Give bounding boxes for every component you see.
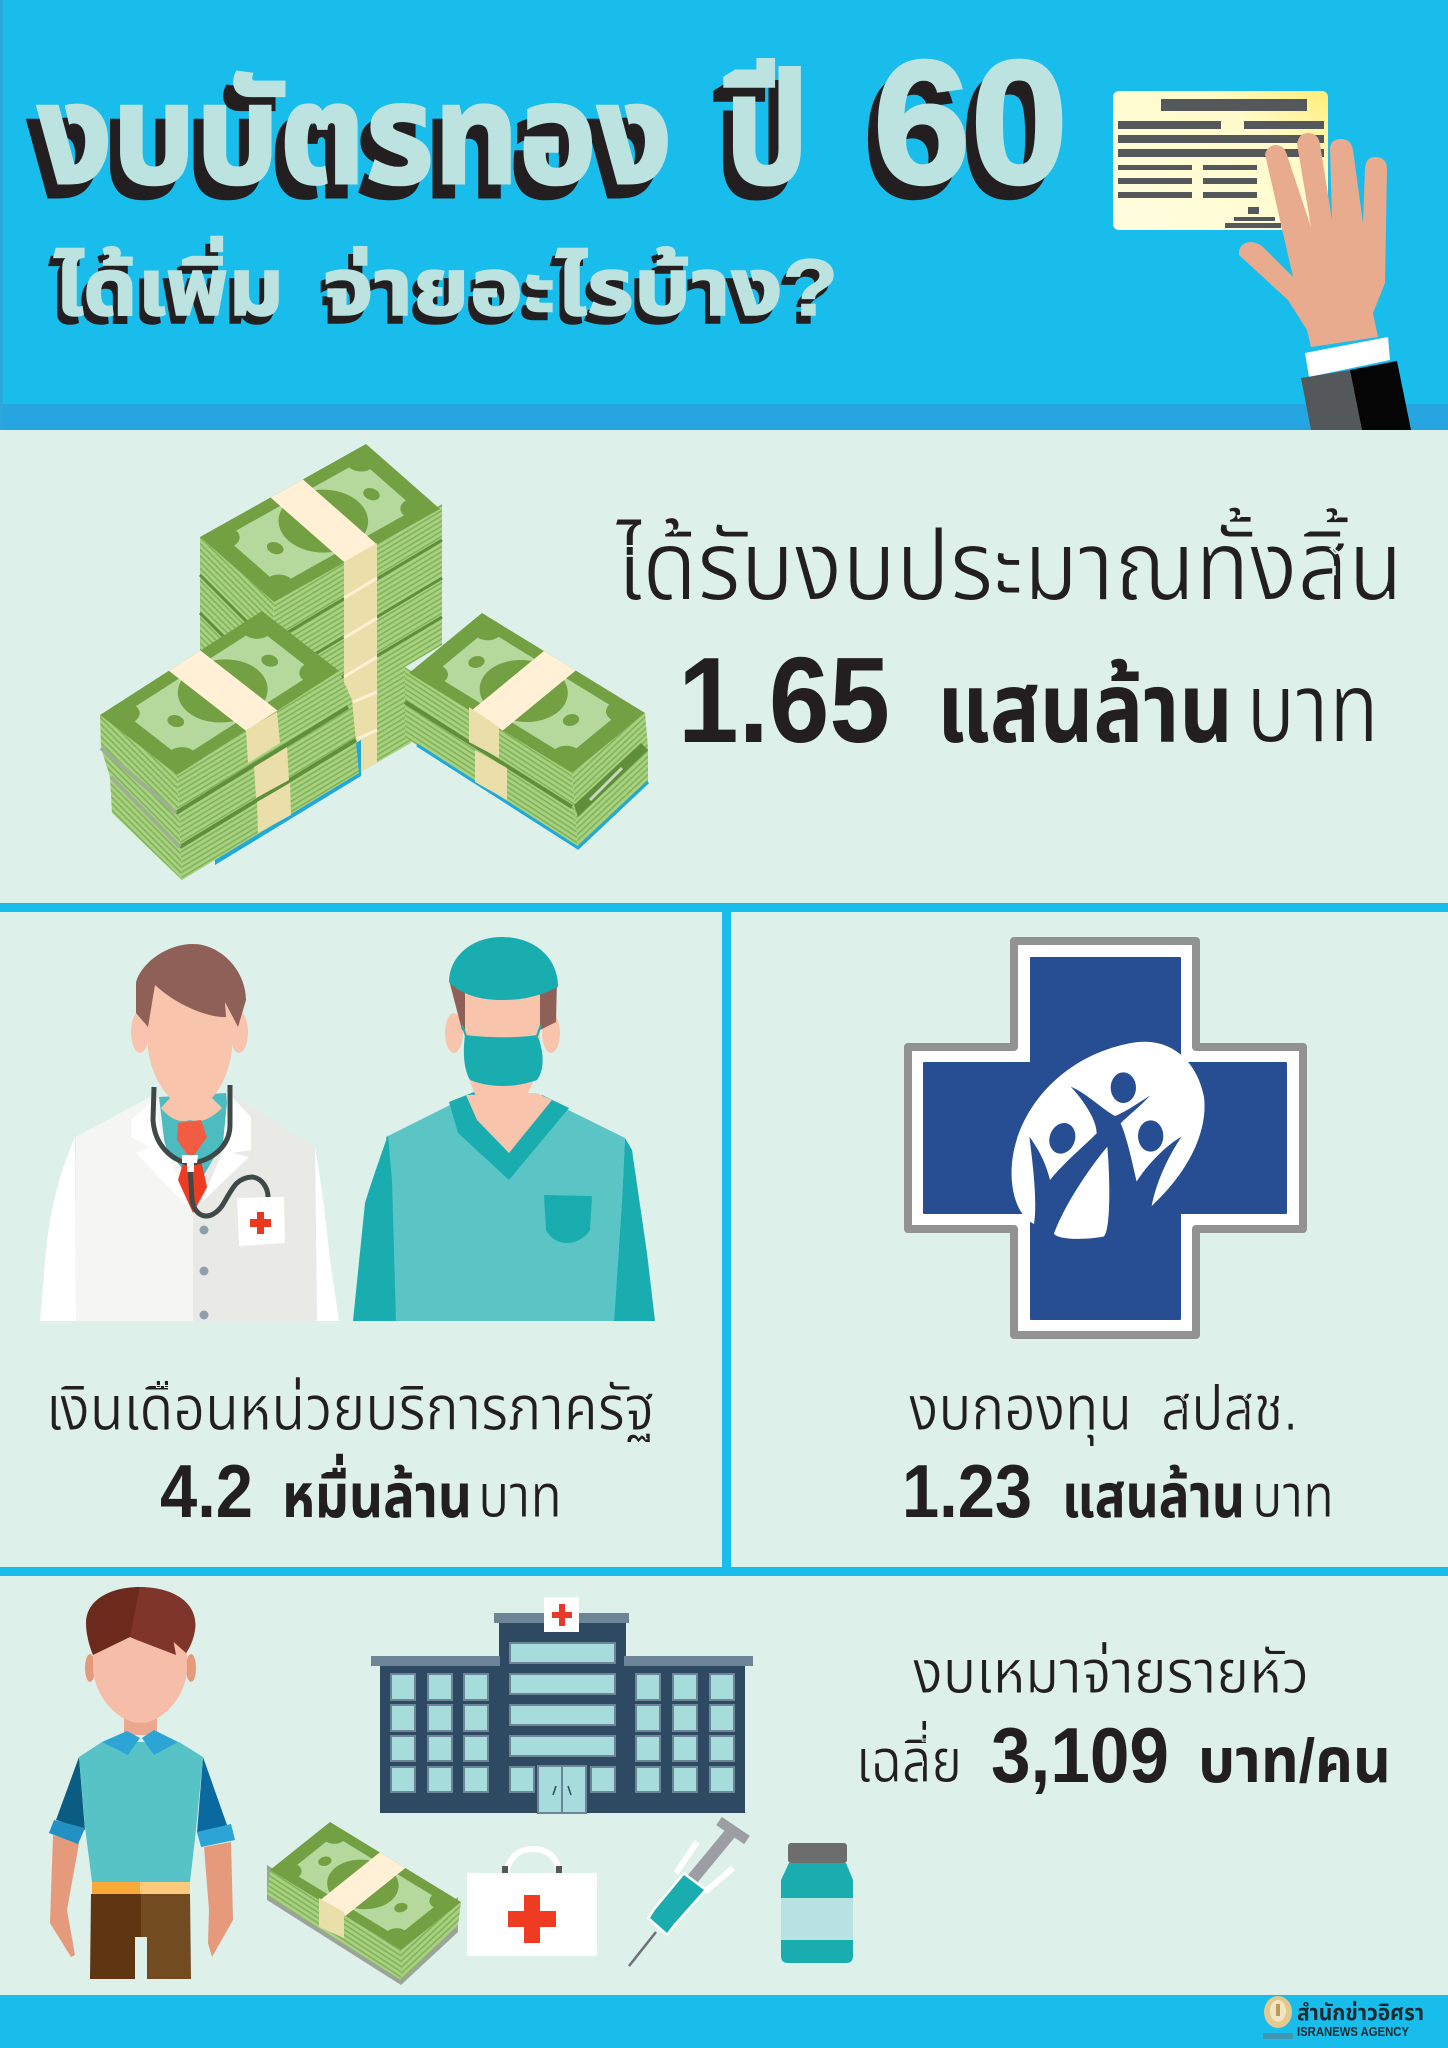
title line 2: [49, 237, 838, 340]
text: salary: เงินเดือนหน่วยบริการภาครัฐ: [46, 1374, 655, 1444]
title line 1: 60: [873, 25, 1068, 221]
text: capitation: [856, 1638, 1391, 1799]
icon: money bundle: [267, 1822, 461, 1985]
text: salary: [46, 1374, 655, 1533]
text: salary: บาท: [478, 1462, 562, 1530]
text: total budget: [614, 507, 1403, 768]
text: capitation: 3,109: [991, 1711, 1169, 1799]
text: total budget: แสนล้าน: [937, 653, 1233, 763]
title line 1: 60: [863, 39, 1058, 235]
title line 1: [27, 25, 1068, 235]
header banner: [0, 0, 1448, 430]
title line 1: ปี: [714, 57, 799, 230]
text: fund: งบกองทุน: [909, 1374, 1132, 1446]
title line 2: ได้เพิ่ม: [54, 237, 284, 332]
text: fund: แสนล้าน: [1062, 1462, 1245, 1530]
icon: hand and sleeve: [1239, 133, 1411, 430]
text: fund: [902, 1374, 1334, 1533]
text: capitation: งบเหมาจ่ายรายหัว: [913, 1638, 1309, 1706]
title line 1: ปี: [724, 43, 809, 216]
illustration: doctor: [40, 944, 339, 1321]
icon: first-aid bag: [467, 1849, 597, 1956]
text: fund: สปสช.: [1161, 1374, 1298, 1444]
title line 1: งบบัตรทอง: [37, 56, 672, 213]
text: capitation: เฉลี่ย: [856, 1720, 962, 1795]
logo: Isranews Agency: สำนักข่าวอิศรา: [1297, 2000, 1424, 2025]
logo: Isranews Agency: ISRANEWS AGENCY: [1297, 2024, 1409, 2039]
icon: gold card: [1113, 91, 1328, 230]
illustration: surgeon: [353, 937, 655, 1321]
title line 2: ได้เพิ่ม: [49, 245, 279, 340]
title line 1: งบบัตรทอง: [27, 70, 662, 227]
icon: medicine bottle: [781, 1843, 853, 1963]
footer bar: [0, 1995, 1448, 2048]
illustration: money stacks: [100, 444, 648, 880]
text: total budget: 1.65: [678, 632, 890, 768]
icon: syringe: [629, 1821, 747, 1966]
text: total budget: บาท: [1246, 653, 1379, 763]
text: capitation: บาท/คน: [1198, 1727, 1391, 1796]
text: salary: หมื่นล้าน: [282, 1453, 472, 1530]
divider lines: [0, 903, 1448, 1576]
front-left stack: [100, 611, 361, 880]
illustration: hospital: [371, 1597, 753, 1813]
right stack: [405, 613, 648, 848]
illustration: person: [49, 1587, 235, 1979]
text: fund: 1.23: [902, 1449, 1032, 1533]
tall stack: [200, 444, 442, 830]
logo: NHSO cross: [908, 941, 1303, 1335]
text: fund: บาท: [1252, 1462, 1334, 1530]
logo: Isranews Agency: [1263, 1996, 1424, 2039]
title line 2: จ่ายอะไรบ้าง?: [323, 243, 838, 332]
text: salary: 4.2: [160, 1449, 253, 1533]
title line 2: จ่ายอะไรบ้าง?: [318, 251, 833, 340]
